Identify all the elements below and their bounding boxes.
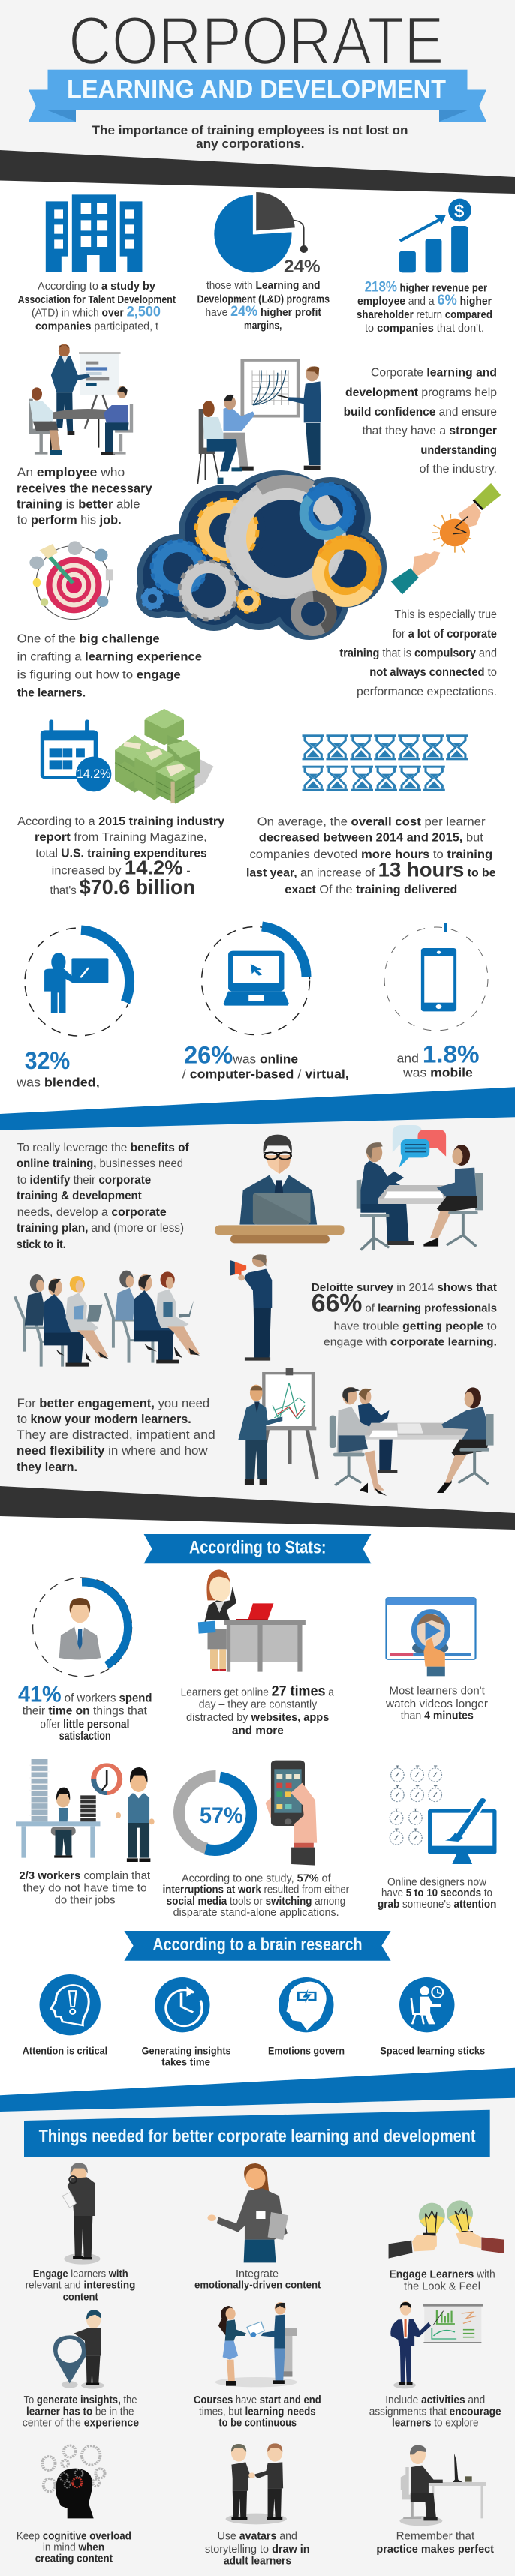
text: 27 times a day [181,1684,335,1737]
text: employee [17,465,152,527]
illustration: three people at table [330,1387,494,1496]
text: 41 percent: satisfaction [59,1730,111,1743]
title: CORPORATE [68,4,444,79]
text: employee: receives the necessary [17,482,152,496]
text: Deloitte survey: 66% of learning professionals [312,1289,497,1317]
icon: calendar with percentage: 14.2% [77,767,110,781]
text: 1.8 percent mobile: was mobile [402,1066,473,1080]
donut: mobile 1.8 percent [384,923,488,1031]
text: Deloitte survey: have trouble getting people to [333,1320,497,1332]
text: engage learners: relevant and interesting [26,2279,135,2291]
icon: hands passing light bulb [391,483,501,594]
blue slanted band two [0,2068,515,2112]
text: ATD study: Association for Talent Development [18,294,176,306]
text: cost per learner: exact Of the training delivered [285,884,457,896]
subtitle: The importance of training employees is not lost on [92,123,408,137]
text: engage the learners: is figuring out how to engage [17,669,181,682]
icon: clock with arrow [155,1977,210,2032]
text: engage learners: content [63,2290,98,2302]
text: revenue [357,279,492,335]
illustration: overworked workers with clock [16,1759,155,1862]
illustration: woman receiving certificate [215,2302,297,2387]
text: generate insights: To generate insights, the [24,2394,137,2406]
icon: spaced learning [399,1977,455,2032]
icon: calendar with percentage [41,722,111,791]
text: cost per learner: decreased between 2014 and 2015, but [259,832,484,845]
text: Deloitte survey: engage with corporate learning. [324,1335,497,1348]
text: 32 percent blended: 32% [25,1047,70,1074]
illustration: meeting with speech bubbles [357,1125,483,1250]
text: 2/3 workers [19,1869,151,1907]
text: revenue: to companies that don't. [365,323,484,335]
text: training expenditures: According to a 2015 training industry [17,815,225,828]
text: cognitive overload: Keep cognitive overload [17,2531,131,2543]
text: 26 percent online [182,1041,349,1082]
ribbon: brain research [124,1931,391,1961]
text: 27 times a day: and more [232,1725,284,1737]
text: better engagement: need flexibility in where and how [17,1444,208,1458]
text: 1.8 percent mobile: and 1.8% [396,1041,479,1068]
text: 32 percent blended [16,1047,100,1089]
text: confidence: Corporate learning and [371,367,497,380]
labels: brain research: Spaced learning sticks [380,2044,485,2056]
background: middle grey section [0,1117,515,1513]
text: avatars: storytelling to draw in [205,2544,310,2556]
text: avatars: adult learners [224,2555,291,2567]
text: 26 percent online: 26%was online [184,1041,298,1068]
text: ATD study: (ATD) in which over 2,500 [32,305,161,320]
icon: attention head [39,1974,101,2035]
illustration: man with laptop at desk [215,1135,344,1243]
text: ATD study: According to a study by [38,281,155,293]
icon: office buildings [46,194,142,272]
text: training expenditures: increased by 14.2% - [52,857,191,879]
background: bottom grey section [0,2097,515,2576]
text: cognitive overload: in mind when [43,2542,104,2554]
text: profit margins: those with Learning and [206,280,320,292]
text: online designers: have 5 to 10 seconds to [381,1887,492,1899]
text: engage the learners: the learners. [17,687,86,700]
text: ATD study [18,281,176,333]
text: compulsory training: not always connected to [369,666,497,679]
text: compulsory training: training that is compulsory and [339,647,497,659]
text: revenue: shareholder return compared [357,309,492,321]
illustration: hands holding bulbs [389,2200,504,2259]
labels: brain research [23,2044,485,2067]
text: generate insights: center of the experience [23,2418,139,2430]
text: Deloitte survey: Deloitte survey in 2014 shows that [312,1281,497,1294]
text: look and feel [389,2269,495,2292]
ribbon: brain research: According to a brain research [152,1935,363,1955]
pie chart 24 percent [214,192,320,277]
illustration: man presenting on easel [238,1368,317,1485]
text: compulsory training: for a lot of corporate [393,628,497,641]
text: 4 minutes: Most learners don't [389,1686,485,1698]
text: practice: practice makes perfect [376,2544,494,2556]
donut: 41 percent workers [33,1578,132,1677]
illustration: seated audience [15,1271,200,1367]
text: benefits of online training: online training, businesses need [17,1157,183,1170]
coin dollar sign: $ [454,201,465,221]
illustration: head with gears [42,2445,105,2518]
icon: stacks of money [115,709,213,804]
text: benefits of online training: training & development [17,1190,142,1202]
text: activities: Include activities and [385,2394,485,2406]
subtitle [92,123,408,151]
text: benefits of online training: training plan, and (more or less) [17,1222,184,1235]
text: employee: An employee who [17,465,125,479]
text: compulsory training: This is especially true [394,608,497,621]
text: courses [194,2394,321,2430]
text: courses: times, but learning needs [199,2406,316,2418]
labels: brain research: Emotions govern [268,2044,345,2056]
text: 27 times a day: distracted by websites, apps [186,1712,329,1724]
text: cognitive overload [17,2531,131,2565]
text: interruptions: According to one study, 57% of [182,1872,332,1884]
text: cost per learner [246,816,496,896]
text: look and feel: the Look & Feel [404,2280,480,2292]
text: employee: to perform his job. [17,513,122,527]
ribbon: learning and development: LEARNING AND DEVELOPMENT [67,75,446,103]
text: compulsory training [339,608,497,698]
text: training expenditures [17,815,225,899]
donut: blended 32 percent [25,928,133,1036]
text: confidence: of the industry. [420,463,497,476]
ribbon: according to stats: According to Stats: [189,1538,326,1558]
illustration: man with location pin [53,2310,104,2389]
text: 27 times a day: day – they are constantly [199,1699,318,1711]
illustration: woman on phone at desk [198,1569,306,1672]
text: benefits of online training: To really leverage the benefits of [17,1142,189,1154]
text: better engagement: For better engagement, you need [17,1397,209,1410]
text: 1.8 percent mobile [396,1041,479,1080]
text: cost per learner: last year, an increase of 13 hours to be [246,858,496,881]
text: confidence: understanding [420,444,497,457]
text: training expenditures: that's $70.6 billion [50,875,195,899]
text: interruptions [163,1872,349,1919]
text: avatars: Use avatars and [218,2531,297,2543]
blue slanted band one [0,1087,515,1130]
text: online designers: grab someone's attention [378,1899,496,1911]
icon: video player and hand [386,1598,476,1676]
dark slanted band top [0,150,515,194]
icon: target with dart [29,541,113,620]
text: online designers [378,1876,496,1911]
text: activities: learners to explore [392,2418,479,2430]
illustration: two men shaking hands [226,2443,287,2524]
text: engage learners: Engage learners with [33,2268,128,2280]
text: 4 minutes: than 4 minutes [401,1710,474,1722]
text: activities: assignments that encourage [369,2406,501,2418]
text: profit margins: margins, [244,320,282,332]
text: profit margins: Development (L&D) programs [197,293,330,305]
text: 26 percent online: / computer-based / virtual, [182,1067,349,1082]
text: employee: training is better able [17,497,140,512]
text: 32 percent blended: was blended, [16,1075,100,1089]
text: generate insights [23,2394,139,2430]
illustration: man with megaphone [230,1254,272,1361]
text: interruptions: disparate stand-alone applications. [173,1907,339,1919]
icon: thirteen hourglasses [302,734,468,791]
background: top grey section [0,0,515,177]
illustration: presenter with two seated colleagues [29,344,133,455]
illustration: man presenting charts [390,2301,483,2388]
text: look and feel: Engage Learners with [389,2269,495,2281]
text: confidence: build confidence and ensure [344,406,497,419]
text: better engagement: They are distracted, impatient and [17,1428,215,1442]
text: engage the learners: One of the big challenge [17,633,160,646]
text: cognitive overload: creating content [35,2553,113,2565]
text: revenue: employee and a 6% higher [357,293,492,308]
text: interruptions: social media tools or switching among [167,1896,345,1908]
text: better engagement: they learn. [17,1461,77,1474]
subtitle: any corporations. [196,137,305,151]
illustration: cloud of gears [136,470,387,640]
pie chart 24 percent: 24% [284,257,320,277]
text: profit margins: have 24% higher profit [206,304,321,320]
text: practice: Remember that [396,2531,474,2543]
text: 27 times a day: Learners get online 27 times a [181,1684,335,1700]
text: ATD study: companies participated, t [35,321,158,333]
text: engage learners [26,2268,135,2302]
text: 2/3 workers: they do not have time to [23,1882,147,1895]
text: Deloitte survey [312,1281,497,1348]
text: benefits of online training: needs, develop a corporate [17,1206,167,1219]
text: profit margins [197,280,330,332]
illustration: woman with document [207,2163,288,2262]
text: activities [369,2394,501,2430]
text: revenue: 218% higher revenue per [365,279,487,295]
text: courses: to be continuous [218,2418,297,2430]
text: integrate emotion: emotionally-driven content [194,2279,321,2291]
text: benefits of online training: stick to it. [17,1238,66,1251]
text: avatars [205,2531,310,2567]
text: 41 percent: their time on things that [23,1705,147,1718]
text: 4 minutes: watch videos longer [385,1698,488,1710]
text: 41 percent: offer little personal [40,1718,129,1731]
icon: growth bar chart with coin [399,199,471,272]
text: confidence: that they have a stronger [363,425,497,437]
ribbon: according to stats [144,1534,371,1563]
text: training expenditures: total U.S. training expenditures [35,848,207,860]
text: confidence: development programs help [345,386,497,399]
text: integrate emotion: Integrate [236,2268,279,2280]
text: 2/3 workers: do their jobs [55,1894,116,1907]
illustration: man at computer desk [399,2445,486,2526]
text: 41 percent: 41% of workers spend [18,1682,152,1707]
text: 4 minutes [385,1686,488,1722]
icon: stopwatches and monitor with brush [390,1766,497,1864]
text: compulsory training: performance expectations. [357,686,497,698]
text: benefits of online training: to identify their corporate [17,1174,151,1187]
illustration: man with magnifier [62,2163,100,2265]
text: cost per learner: On average, the overall cost per learner [258,816,486,829]
illustration: presenter at chart with audience [197,360,321,484]
labels: brain research: Attention is critical [23,2044,107,2056]
dark slanted band two [0,1486,515,1530]
donut: 57 percent: 57% [200,1803,243,1828]
text: interruptions: interruptions at work resulted from either [163,1884,349,1896]
text: courses: Courses have start and end [194,2394,321,2406]
text: training expenditures: report from Training Magazine, [35,831,207,844]
ribbon: learning and development [29,70,486,122]
text: online designers: Online designers now [387,1876,486,1888]
text: 2/3 workers: 2/3 workers complain that [19,1869,151,1882]
text: engage the learners: in crafting a learning experience [17,651,202,664]
text: benefits of online training [17,1142,189,1251]
icon: smartphone in hand [266,1761,317,1866]
text: cost per learner: companies devoted more hours to training [249,848,492,861]
text: generate insights: learner has to be in the [26,2406,134,2418]
labels: brain research: Generating insights [142,2044,231,2056]
text: engage the learners [17,633,202,700]
text: practice [376,2531,494,2556]
text: better engagement [17,1397,215,1474]
donut: 57 percent [179,1776,251,1851]
banner: things needed [24,2110,490,2157]
donut: online 26 percent [201,926,309,1035]
text: confidence [344,367,497,476]
text: 41 percent [18,1682,152,1743]
text: integrate emotion [194,2268,321,2291]
labels: brain research: takes time [161,2055,210,2067]
text: better engagement: to know your modern learners. [17,1413,191,1426]
icon: emotions head [279,1977,333,2032]
